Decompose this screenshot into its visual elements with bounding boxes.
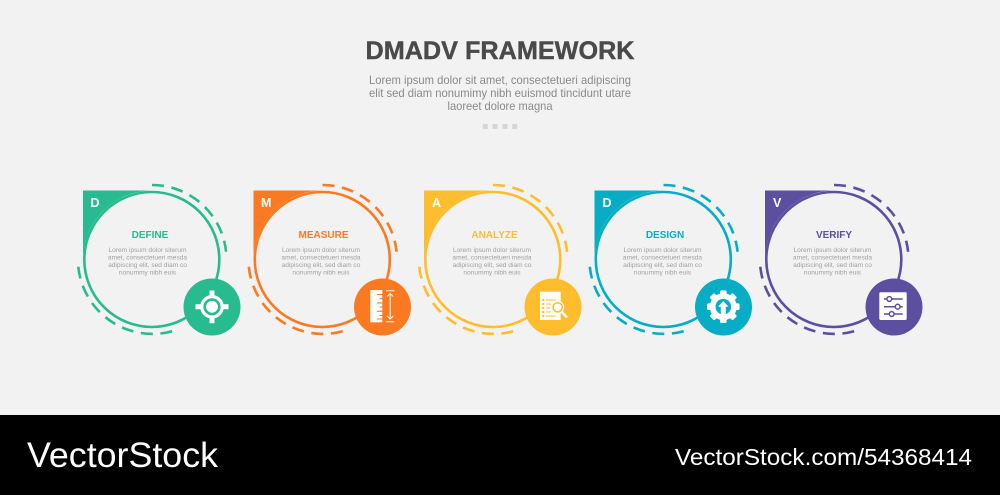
body text: define: adipiscing elit, sed diam co <box>108 262 187 269</box>
body text: verify: adipiscing elit, sed diam co <box>793 262 872 269</box>
body text: define: amet, consectetueri mesda <box>108 254 187 262</box>
subtitle text block: laoreet dolore magna <box>448 100 553 113</box>
body text: analyze: amet, consectetueri mesda <box>452 254 532 262</box>
body text: design: adipiscing elit, sed diam co <box>623 262 702 269</box>
subtitle text block: elit sed diam nonumimy nibh euismod tincidunt utare <box>369 87 631 100</box>
body text: measure: Lorem ipsum dolor siterum <box>282 247 361 254</box>
body text: design <box>623 247 702 276</box>
body text: analyze <box>452 247 532 276</box>
title dots divider <box>483 124 517 129</box>
icon: sliders <box>866 278 922 336</box>
panel: design <box>590 185 752 336</box>
body text: verify: amet, consectetueri mesda <box>793 254 872 262</box>
icon: document search <box>524 278 582 336</box>
body text: verify: nonummy nibh euis <box>804 270 862 276</box>
ring and corner: design <box>590 185 738 334</box>
heading: define: DEFINE <box>132 230 169 241</box>
panel: define <box>78 185 240 336</box>
title: DMADV FRAMEWORK <box>366 37 634 65</box>
heading: verify: VERIFY <box>816 230 852 241</box>
letter: D: D <box>602 196 612 210</box>
body text: define <box>108 247 187 276</box>
body text: define: nonummy nibh euis <box>119 270 177 276</box>
ring and corner: measure <box>249 185 397 334</box>
body text: design: Lorem ipsum dolor siterum <box>623 247 702 254</box>
ring and corner: verify <box>760 185 908 334</box>
body text: design: nonummy nibh euis <box>634 270 692 276</box>
icon: ruler <box>354 278 411 336</box>
body text: analyze: Lorem ipsum dolor siterum <box>453 247 532 254</box>
heading: measure: MEASURE <box>298 230 349 241</box>
body text: measure: nonummy nibh euis <box>292 270 350 276</box>
panel: verify <box>760 185 922 336</box>
letter: A: A <box>432 196 441 210</box>
letter: V: V <box>773 196 782 210</box>
body text: verify: Lorem ipsum dolor siterum <box>793 247 872 254</box>
watermark bar <box>0 415 1000 495</box>
body text: analyze: adipiscing elit, sed diam co <box>453 262 532 269</box>
body text: measure: amet, consectetueri mesda <box>281 254 361 262</box>
heading: analyze: ANALYZE <box>471 230 518 241</box>
icon: gear with arrow <box>695 278 752 336</box>
subtitle text block <box>369 74 631 113</box>
heading: design: DESIGN <box>646 230 684 241</box>
panel: analyze <box>419 185 582 336</box>
subtitle text block: Lorem ipsum dolor sit amet, consectetueri adipiscing <box>369 74 631 87</box>
body text: measure <box>281 247 361 276</box>
body text: verify <box>793 247 872 276</box>
icon: target <box>184 278 240 336</box>
watermark url text: VectorStock.com/54368414 <box>675 444 972 470</box>
body text: design: amet, consectetueri mesda <box>623 254 702 262</box>
ring and corner: analyze <box>419 185 567 334</box>
panel: measure <box>249 185 411 336</box>
body text: analyze: nonummy nibh euis <box>463 270 521 276</box>
body text: define: Lorem ipsum dolor siterum <box>108 247 187 254</box>
letter: D: D <box>90 196 100 210</box>
ring and corner: define <box>78 185 226 334</box>
body text: measure: adipiscing elit, sed diam co <box>282 262 361 269</box>
watermark logo text: VectorStock <box>27 436 219 475</box>
letter: M: M <box>261 196 271 210</box>
